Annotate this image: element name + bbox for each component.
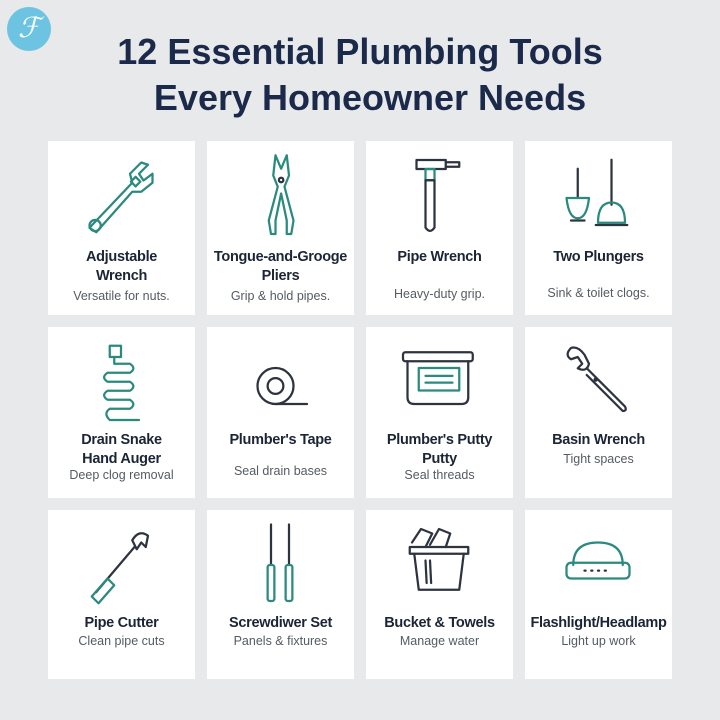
card: pipe cutter: Clean pipe cuts [78,634,165,648]
icon: screwdrivers [266,523,294,602]
text [387,432,492,467]
card: headlamp [525,510,672,679]
card: putty: Seal threads [404,468,475,482]
icon: basin wrench [566,346,627,412]
text: Hand Auger [82,451,161,467]
card: tape [207,327,354,498]
card: pliers [207,141,354,315]
card: pipe wrench [366,141,513,315]
icon: plungers [565,158,628,226]
text [86,249,157,284]
text: Tongue-and-Grooge [214,249,347,265]
title: Every Homeowner Needs [154,77,586,118]
card: basin wrench [525,327,672,498]
card: headlamp: Light up work [561,634,636,648]
logo: ℱ [18,13,40,44]
text: Plumber's Putty [387,432,492,448]
card: putty [366,327,513,498]
icon: adjustable wrench [88,161,154,234]
text: Putty [422,451,457,467]
text: Two Plungers [553,249,644,265]
logo [7,7,51,51]
card: pipe cutter [48,510,195,679]
card: adjustable wrench: Versatile for nuts. [73,289,170,303]
card: plungers: Sink & toilet clogs. [547,286,650,300]
text: Pliers [262,268,299,284]
card: pipe wrench: Heavy-duty grip. [394,287,485,301]
icon: pliers [268,154,295,236]
text: Wrench [96,268,147,284]
icon: drain snake [103,344,140,422]
icon: pipe wrench [415,158,460,232]
card: drain snake [48,327,195,498]
text: Flashlight/Headlamp [530,615,667,631]
icon: putty tub [402,351,474,406]
card: adjustable wrench [48,141,195,315]
card: bucket [366,510,513,679]
card: screwdriver [207,510,354,679]
card: plungers [525,141,672,315]
text: Bucket & Towels [384,615,495,631]
text: Drain Snake [81,432,162,448]
title [117,31,603,118]
icon: bucket [408,528,470,591]
icon: headlamp [565,541,631,580]
card: screwdriver: Panels & fixtures [234,634,327,648]
card: pliers: Grip & hold pipes. [231,289,330,303]
text: Plumber's Tape [229,432,332,448]
text: Pipe Wrench [397,249,482,265]
card: tape: Seal drain bases [234,464,327,478]
icon: tape [256,366,308,406]
icon: pipe cutter [90,532,150,604]
card: basin wrench: Tight spaces [563,452,634,466]
text [81,432,162,467]
card: drain snake: Deep clog removal [69,468,174,482]
text: Adjustable [86,249,157,265]
text [214,249,347,284]
title: 12 Essential Plumbing Tools [117,31,603,72]
text: Screwdiwer Set [229,615,332,631]
text: Basin Wrench [552,432,645,448]
text: Pipe Cutter [84,615,159,631]
card: bucket: Manage water [400,634,479,648]
